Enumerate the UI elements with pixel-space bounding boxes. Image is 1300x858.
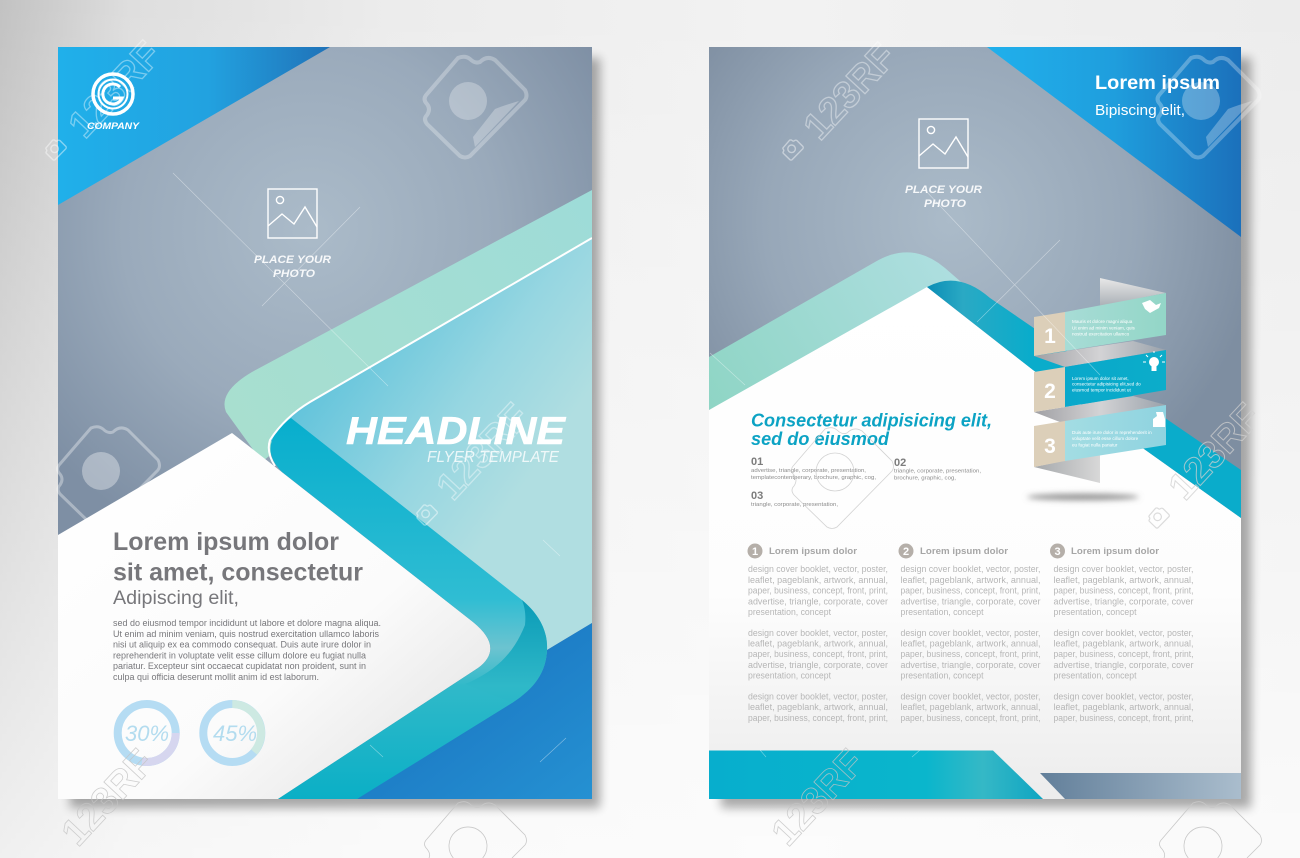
panel: right flyer page bbox=[709, 47, 1241, 799]
column 1: presentation, concept bbox=[748, 607, 831, 618]
column 2: advertise, triangle, corporate, cover bbox=[900, 660, 1041, 671]
chart: 45% ring: 45% bbox=[213, 721, 257, 746]
page shadows bbox=[70, 58, 1251, 808]
column 2: advertise, triangle, corporate, cover bbox=[900, 596, 1041, 608]
watermark: camera top center bbox=[424, 57, 526, 158]
column 1: presentation, concept bbox=[748, 670, 831, 682]
heading: teal: Consectetur adipisicing elit, bbox=[751, 410, 992, 430]
ribbon item 1: Ut enim ad minim veniam, quis bbox=[1072, 326, 1136, 330]
column 2 bbox=[898, 544, 1041, 724]
column 1: paper, business, concept, front, print, bbox=[748, 586, 888, 596]
column 2: presentation, concept bbox=[900, 670, 984, 682]
ribbon item 1: 1 bbox=[1044, 325, 1056, 348]
column 3: advertise, triangle, corporate, cover bbox=[1054, 660, 1194, 671]
panel: left flyer page bbox=[58, 47, 592, 799]
body paragraph: sed do eiusmod tempor incididunt ut labore et dolore magna aliqua. bbox=[113, 618, 381, 628]
heading: lorem ipsum bbox=[114, 532, 363, 584]
column 3: paper, business, concept, front, print, bbox=[1054, 586, 1194, 596]
headline: HEADLINE bbox=[346, 410, 566, 453]
ribbon item 3: eu fugiat nulla pariatur bbox=[1072, 442, 1118, 448]
column 2: paper, business, concept, front, print, bbox=[900, 649, 1040, 660]
chart: 45% ring bbox=[203, 704, 261, 762]
company label: COMPANY bbox=[87, 121, 140, 131]
icon: company logo bbox=[93, 74, 133, 114]
ribbon item 3: 3 bbox=[1044, 435, 1056, 458]
column 3: design cover booklet, vector, poster, bbox=[1054, 628, 1194, 639]
photo label: PHOTO bbox=[273, 268, 315, 280]
list item 01: templatecontentperary, brochure, graphic, cog, bbox=[751, 475, 876, 481]
dark fold of teal band bbox=[465, 600, 547, 703]
column 3: presentation, concept bbox=[1054, 670, 1137, 682]
column 3: paper, business, concept, front, print, bbox=[1054, 713, 1194, 724]
body paragraph: reprehenderit in voluptate velit esse cillum dolore eu fugiat nulla bbox=[113, 650, 366, 660]
watermark: 123RF right: 123RF bbox=[1161, 396, 1269, 508]
column 3: leaflet, pageblank, artwork, annual, bbox=[1054, 702, 1194, 713]
list item 01: 01 bbox=[751, 456, 763, 468]
photo label: PLACE YOUR bbox=[905, 184, 982, 196]
white content panel bbox=[709, 287, 1241, 799]
ribbon item 2 bbox=[1034, 350, 1166, 412]
column 3: advertise, triangle, corporate, cover bbox=[1054, 596, 1194, 608]
icon: photo placeholder bbox=[919, 119, 968, 168]
column 2: design cover booklet, vector, poster, bbox=[900, 628, 1040, 639]
heading: lorem ipsum: Lorem ipsum dolor bbox=[113, 528, 339, 556]
watermark: small camera top left bbox=[46, 140, 66, 160]
column 1: design cover booklet, vector, poster, bbox=[748, 692, 888, 702]
column 1: design cover booklet, vector, poster, bbox=[748, 628, 888, 639]
column 1: leaflet, pageblank, artwork, annual, bbox=[748, 702, 888, 713]
ribbon item 1: nostrud exercitation ullamco bbox=[1072, 332, 1130, 336]
shadow under ribbon graphic bbox=[1027, 494, 1139, 500]
column 1: advertise, triangle, corporate, cover bbox=[748, 596, 889, 608]
watermark: camera bottom center bbox=[424, 802, 526, 858]
column 1 bbox=[748, 544, 889, 724]
column 1: advertise, triangle, corporate, cover bbox=[748, 660, 889, 671]
teal band bbox=[270, 418, 547, 799]
column 2: presentation, concept bbox=[900, 607, 984, 618]
watermark: camera bottom right bbox=[1160, 802, 1262, 858]
column 2: Lorem ipsum dolor bbox=[920, 546, 1008, 557]
ribbon item 3 bbox=[1034, 405, 1166, 467]
subheadline: FLYER TEMPLATE bbox=[427, 449, 560, 466]
body paragraph: Ut enim ad minim veniam, quis nostrud exercitation ullamco laboris bbox=[113, 629, 379, 639]
list item 02: 02 bbox=[894, 457, 906, 469]
column 3: leaflet, pageblank, artwork, annual, bbox=[1054, 575, 1194, 586]
corner banner: top left bbox=[58, 47, 330, 205]
column 2: paper, business, concept, front, print, bbox=[900, 713, 1040, 724]
chart: 30% ring: 30% bbox=[125, 721, 169, 746]
column 1: design cover booklet, vector, poster, bbox=[748, 564, 888, 575]
column 3: design cover booklet, vector, poster, bbox=[1054, 564, 1194, 575]
list item 03: 03 bbox=[751, 490, 763, 502]
watermark: 123RF bottom right page: 123RF bbox=[764, 742, 872, 854]
watermark: small camera right bbox=[1149, 508, 1169, 528]
mint fold band bbox=[224, 190, 592, 462]
body paragraph: nisi ut aliquip ex ea commodo consequat. Duis aute irure dolor in bbox=[113, 640, 371, 650]
heading: lorem ipsum: sit amet, consectetur bbox=[113, 558, 363, 586]
photo label: PHOTO bbox=[924, 198, 966, 210]
decorative crossing lines bbox=[173, 173, 1100, 762]
column 1: leaflet, pageblank, artwork, annual, bbox=[748, 638, 888, 650]
ribbon item 2: Lorem ipsum dolor sit amet, bbox=[1072, 376, 1129, 381]
white content panel bbox=[58, 433, 490, 799]
column 3: Lorem ipsum dolor bbox=[1071, 546, 1159, 557]
mint ribbon bbox=[709, 252, 968, 410]
column 2: paper, business, concept, front, print, bbox=[900, 586, 1040, 596]
column 2: design cover booklet, vector, poster, bbox=[900, 692, 1040, 702]
body paragraph: pariatur. Excepteur sint occaecat cupidatat non proident, sunt in bbox=[113, 661, 366, 671]
list item 02 bbox=[894, 458, 980, 480]
ribbon item 1 bbox=[1034, 293, 1166, 356]
column 1: paper, business, concept, front, print, bbox=[748, 713, 888, 724]
list item 01 bbox=[751, 458, 876, 480]
column 1: leaflet, pageblank, artwork, annual, bbox=[748, 575, 888, 586]
list item 01: advertise, triangle, corporate, presentation, bbox=[751, 468, 866, 474]
ribbon item 2: 2 bbox=[1044, 380, 1056, 403]
list item 02: brochure, graphic, cog, bbox=[894, 476, 956, 482]
column 3 bbox=[1050, 544, 1194, 724]
icon: photo placeholder bbox=[268, 189, 317, 238]
column 3: design cover booklet, vector, poster, bbox=[1054, 692, 1194, 702]
bottom gray bar bbox=[1040, 773, 1241, 799]
watermark: small camera center bbox=[417, 505, 437, 525]
watermark: camera center right page bbox=[792, 428, 894, 528]
column 3: leaflet, pageblank, artwork, annual, bbox=[1054, 638, 1194, 650]
banner title: Lorem ipsum bbox=[1095, 72, 1220, 94]
light blue panel bbox=[270, 238, 592, 650]
column 3: 3 bbox=[1054, 546, 1061, 558]
heading: teal bbox=[751, 413, 990, 445]
bottom teal bar bbox=[709, 750, 1043, 799]
banner subtitle: Bipiscing elit, bbox=[1095, 103, 1185, 119]
column 3: paper, business, concept, front, print, bbox=[1054, 649, 1194, 660]
teal ribbon bbox=[927, 281, 1241, 518]
watermark: 123RF bottom left: 123RF bbox=[54, 742, 162, 854]
subheading: Adipiscing elit, bbox=[113, 587, 239, 609]
watermark: camera left bbox=[58, 427, 160, 528]
watermark: 123RF top left: 123RF bbox=[61, 34, 169, 146]
body paragraph: culpa qui officia deserunt mollit anim id est laborum. bbox=[113, 672, 319, 682]
ribbon item 2: eiusmod tempor incididunt ut bbox=[1072, 388, 1131, 392]
chart: 30% ring bbox=[118, 704, 176, 762]
ribbon item 3: voluptate velit esse cillum dolore bbox=[1072, 436, 1139, 441]
deep blue corner bbox=[357, 623, 592, 799]
photo label bbox=[254, 256, 331, 277]
watermark: 123RF center: 123RF bbox=[429, 396, 537, 508]
list item 03 bbox=[751, 492, 838, 507]
white curve line bbox=[269, 238, 592, 466]
column 1: paper, business, concept, front, print, bbox=[748, 649, 888, 660]
column 2: leaflet, pageblank, artwork, annual, bbox=[900, 638, 1040, 650]
watermark: camera top right bbox=[1158, 57, 1260, 158]
watermark: small camera top right page bbox=[783, 140, 803, 160]
column 2: leaflet, pageblank, artwork, annual, bbox=[900, 575, 1040, 586]
watermark: 123RF top right page: 123RF bbox=[796, 36, 904, 148]
ribbon item 1: Mauris et dolore magni aliqua bbox=[1072, 319, 1133, 324]
heading: teal: sed do eiusmod bbox=[751, 429, 890, 449]
column 2: design cover booklet, vector, poster, bbox=[900, 564, 1040, 575]
ribbon item 2: consectetur adipisicing elit,sed do bbox=[1072, 382, 1141, 386]
infographic: numbered folded ribbon bbox=[1034, 278, 1166, 483]
photo label bbox=[905, 186, 982, 207]
column 1: 1 bbox=[752, 546, 758, 558]
column 2: 2 bbox=[903, 546, 909, 558]
column 1: Lorem ipsum dolor bbox=[769, 546, 857, 557]
column 3: presentation, concept bbox=[1054, 607, 1137, 618]
list item 02: triangle, corporate, presentation, bbox=[894, 468, 981, 474]
ribbon item 3: Duis aute irure dolor in reprehenderit in bbox=[1072, 430, 1152, 435]
body paragraph bbox=[113, 618, 381, 682]
corner banner: top right bbox=[987, 47, 1241, 237]
list item 03: triangle, corporate, presentation, bbox=[751, 502, 838, 508]
photo label: PLACE YOUR bbox=[254, 254, 331, 266]
column 2: leaflet, pageblank, artwork, annual, bbox=[900, 702, 1040, 713]
